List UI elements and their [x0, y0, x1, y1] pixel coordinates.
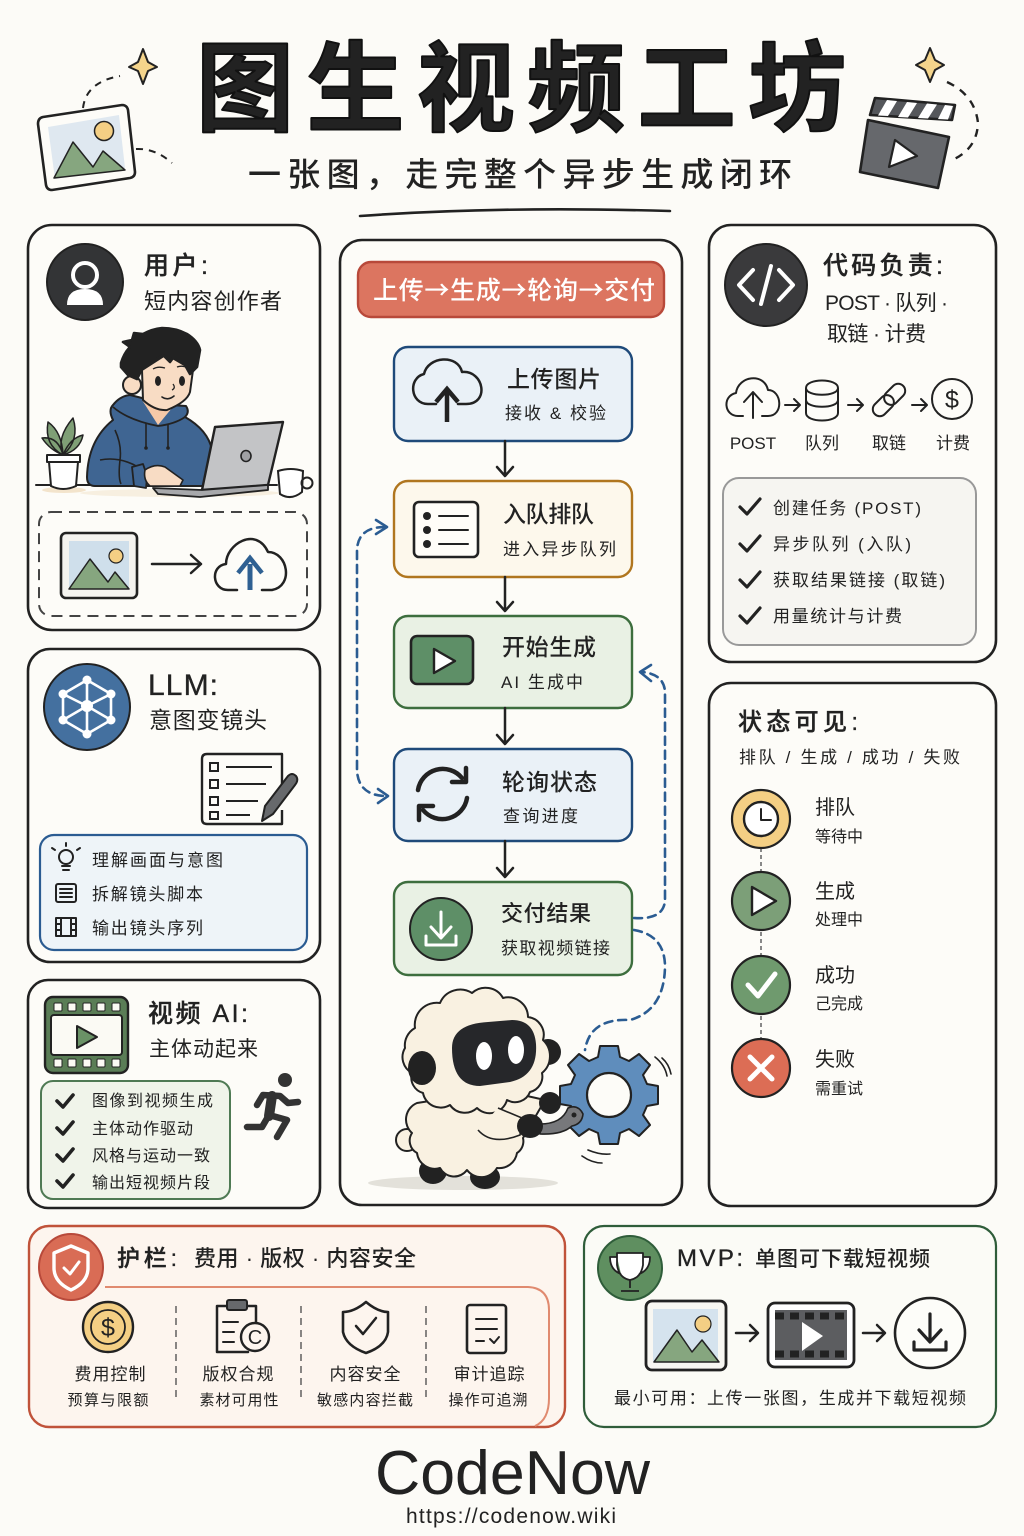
- text: item 3: 输出镜头序列: [92, 919, 203, 938]
- text: feature items: 风格与运动一致: [92, 1147, 210, 1165]
- status: queued: [732, 790, 863, 848]
- panel: pipeline: [340, 240, 682, 1205]
- status: failed: 失败: [815, 1048, 855, 1071]
- checklist: code duties: [723, 478, 976, 645]
- icons: code flow: $: [945, 386, 959, 414]
- item: cost control: 费用控制: [74, 1365, 146, 1384]
- subtitle: 一张图，走完整个异步生成闭环: [248, 156, 792, 193]
- step: queue: [394, 481, 632, 577]
- text: feature items: 输出短视频片段: [92, 1174, 210, 1192]
- heading: guardrails: 费用 · 版权 · 内容安全: [194, 1246, 416, 1271]
- step: deliver: [394, 882, 632, 975]
- step: polling: 轮询状态: [502, 769, 597, 795]
- icon: film strip: [56, 918, 76, 936]
- panel: status: [709, 683, 996, 1206]
- text: checklist items: 获取结果链接 (取链): [773, 571, 945, 590]
- text: status list: 排队 / 生成 / 成功 / 失败: [739, 748, 960, 767]
- item: cost control: 预算与限额: [68, 1391, 148, 1409]
- icon: runner: [247, 1073, 298, 1137]
- icons: code flow: [726, 378, 972, 420]
- list: LLM outputs: [40, 835, 307, 950]
- icon: script and pencil: [202, 754, 297, 824]
- item: content safety: [317, 1302, 413, 1409]
- status: failed: [732, 1039, 863, 1098]
- step: generate: 开始生成: [502, 634, 596, 660]
- text: code duties: 取链 · 计费: [827, 323, 926, 346]
- text: checklist items: 创建任务 (POST): [773, 499, 921, 518]
- link: website: https://codenow.wiki: [406, 1505, 616, 1528]
- text: code duties: [825, 292, 948, 346]
- status: success: 成功: [815, 964, 855, 987]
- dashed arrow: left loop: [357, 520, 388, 803]
- arrow: [497, 441, 513, 476]
- status: success: 己完成: [815, 995, 863, 1013]
- dashed arrow: right loop: [634, 665, 665, 918]
- icon: shield badge: [39, 1234, 103, 1300]
- icon: film frame: [45, 997, 128, 1073]
- checks: [740, 499, 760, 623]
- status: success: [732, 956, 863, 1014]
- status: queued: 排队: [815, 796, 855, 819]
- step: upload: 接收 & 校验: [505, 404, 606, 423]
- heading: code: 代码负责:: [823, 252, 943, 280]
- step: polling: [394, 749, 632, 841]
- heading: user: 用户:: [144, 252, 208, 280]
- status: generating: 生成: [815, 880, 855, 903]
- heading: MVP: 单图可下载短视频: [755, 1248, 930, 1271]
- icon: script list: [56, 884, 76, 902]
- heading: MVP: [677, 1245, 930, 1272]
- caption: MVP: 最小可用：上传一张图，生成并下载短视频: [614, 1389, 966, 1408]
- labels: code flow: [730, 434, 970, 453]
- step: deliver: 交付结果: [501, 901, 591, 926]
- step: upload: [394, 347, 632, 441]
- step: generate: [394, 616, 632, 708]
- text: checklist items: 异步队列 (入队): [773, 535, 911, 554]
- list: video AI features: [41, 1081, 230, 1199]
- step: polling: 查询进度: [503, 807, 578, 826]
- text: intent to shots: 意图变镜头: [149, 707, 267, 733]
- mascot: sheep robot with gear: [368, 988, 671, 1190]
- status: queued: 等待中: [815, 828, 863, 846]
- item: copyright: [200, 1300, 278, 1409]
- labels: code flow: 取链: [872, 434, 906, 453]
- title: 图生视频工坊: [196, 34, 846, 144]
- labels: code flow: POST: [730, 434, 776, 453]
- item: audit trail: 操作可追溯: [448, 1392, 528, 1409]
- icon: network: [44, 664, 130, 750]
- item: cost control: [68, 1302, 148, 1409]
- step: deliver: 获取视频链接: [501, 939, 610, 958]
- text: feature items: [92, 1092, 213, 1192]
- icon: lightbulb: [52, 843, 80, 870]
- panel: code responsibilities: [709, 225, 996, 662]
- dashed arrow: to mascot: [585, 930, 665, 1050]
- text: code duties: POST · 队列 ·: [825, 292, 948, 315]
- text: checklist items: [773, 499, 945, 626]
- panel: user: [28, 225, 320, 630]
- item: content safety: 敏感内容拦截: [317, 1392, 413, 1409]
- step: generate: AI 生成中: [501, 673, 583, 692]
- panel: LLM: [28, 649, 320, 962]
- item: copyright: 版权合规: [202, 1365, 274, 1384]
- text: feature items: 主体动作驱动: [92, 1120, 193, 1138]
- step: queue: 入队排队: [503, 501, 594, 527]
- banner: pipeline: 上传→生成→轮询→交付: [373, 271, 655, 307]
- heading: LLM: LLM:: [148, 669, 218, 702]
- status: generating: 处理中: [815, 911, 863, 929]
- icon: user avatar: [47, 244, 123, 320]
- item: copyright: C: [248, 1327, 262, 1349]
- icon: trophy badge: [598, 1236, 662, 1300]
- item: audit trail: [448, 1305, 528, 1409]
- heading: MVP: MVP:: [677, 1245, 743, 1272]
- item: cost control: $: [101, 1314, 115, 1342]
- status: generating: [732, 872, 863, 930]
- text: short-video creator: 短内容创作者: [144, 289, 282, 314]
- item: content safety: 内容安全: [330, 1365, 400, 1384]
- step: upload: 上传图片: [507, 366, 601, 392]
- text: feature items: 图像到视频生成: [92, 1092, 213, 1110]
- panel: video AI: [28, 980, 320, 1208]
- arrow: [497, 708, 513, 744]
- banner: pipeline: [358, 262, 664, 317]
- step: queue: 进入异步队列: [503, 540, 616, 559]
- dividers: [176, 1306, 426, 1400]
- panel: MVP: [584, 1226, 996, 1427]
- arrow: [497, 841, 513, 877]
- flow: image to video to download: [646, 1298, 965, 1370]
- text: subject moves: 主体动起来: [149, 1038, 258, 1061]
- icon: clapperboard with sparkle: [860, 48, 978, 188]
- timeline connector: [760, 848, 762, 1040]
- text: item 1: 理解画面与意图: [92, 851, 223, 870]
- item: copyright: 素材可用性: [200, 1392, 278, 1409]
- item: audit trail: 审计追踪: [454, 1365, 524, 1384]
- arrow: [497, 577, 513, 611]
- icon: code badge: [725, 244, 807, 326]
- text: item 2: 拆解镜头脚本: [92, 885, 203, 904]
- icon: tilted photo with sparkle: [38, 49, 172, 190]
- labels: code flow: 队列: [805, 434, 839, 453]
- text: checklist items: 用量统计与计费: [773, 607, 902, 626]
- labels: code flow: 计费: [936, 434, 970, 453]
- checks: [57, 1095, 73, 1187]
- heading: video AI: 视频 AI:: [148, 1000, 248, 1028]
- illustration: creator at laptop: [36, 328, 312, 497]
- heading: status: 状态可见:: [738, 709, 858, 736]
- subtitle underline: [360, 209, 670, 216]
- panel: guardrails: [29, 1226, 565, 1427]
- status: failed: 需重试: [815, 1080, 863, 1098]
- heading: guardrails: 护栏:: [117, 1245, 177, 1271]
- brand: CodeNow: CodeNow: [375, 1439, 650, 1508]
- upload flow: image to cloud: [39, 512, 307, 616]
